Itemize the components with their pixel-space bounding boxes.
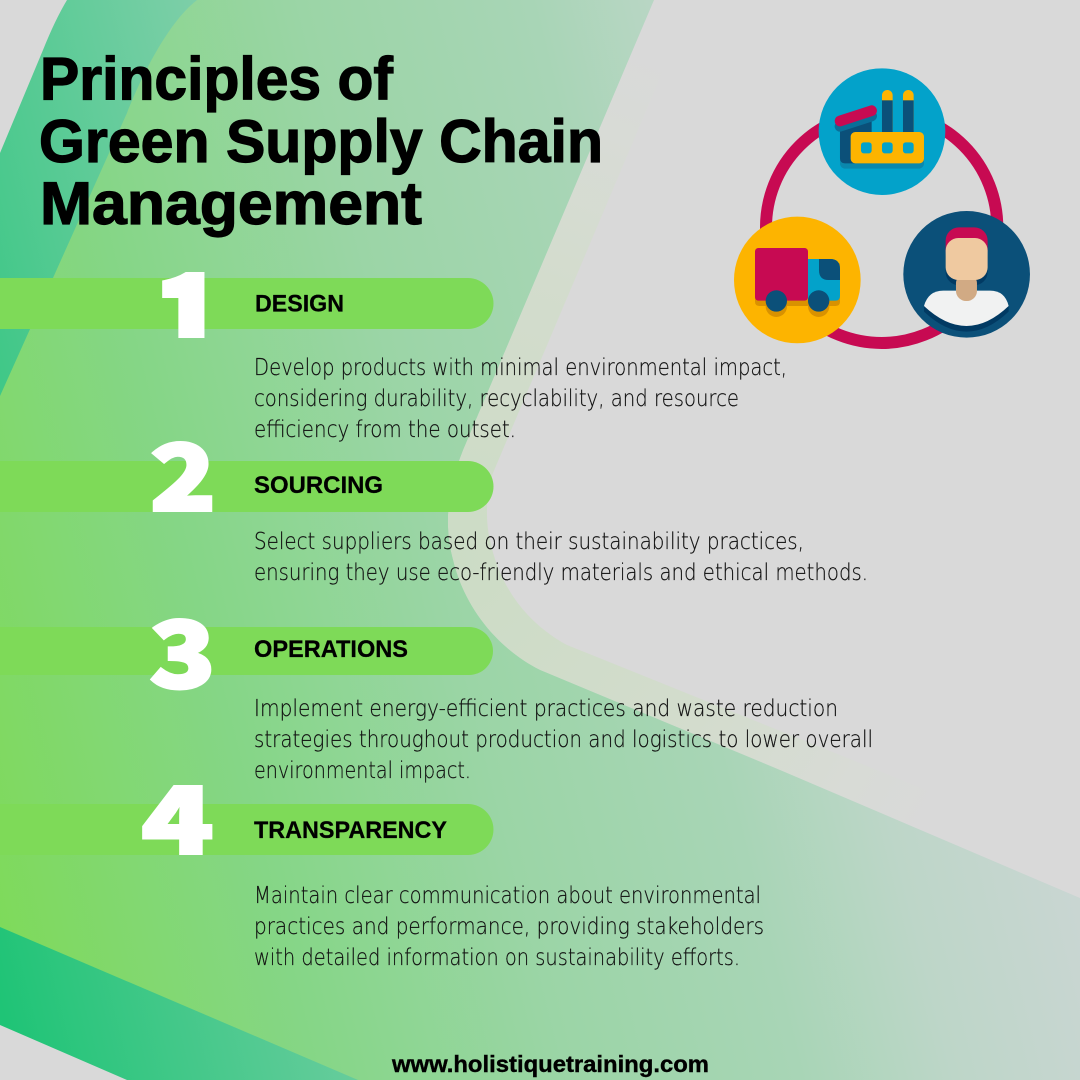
step 3: operations bbox=[0, 582, 873, 784]
body text: Develop products with minimal environmental impact, bbox=[254, 355, 787, 381]
step 2: sourcing bbox=[0, 404, 868, 586]
body text: efficiency from the outset. bbox=[254, 417, 516, 443]
number 1: 1 bbox=[153, 223, 225, 394]
pill bbox=[0, 804, 493, 855]
body text: environmental impact. bbox=[254, 758, 471, 784]
body text: Implement energy-efficient practices and waste reduction bbox=[254, 696, 838, 722]
body text: with detailed information on sustainability efforts. bbox=[254, 945, 740, 971]
pill bbox=[0, 278, 494, 329]
footer url: www.holistiquetraining.com bbox=[391, 1051, 709, 1077]
heading: DESIGN bbox=[255, 290, 344, 318]
icon: supply chain cycle bbox=[734, 68, 1030, 343]
body text: ensuring they use eco-friendly materials and ethical methods. bbox=[254, 560, 868, 586]
body text: Maintain clear communication about environmental bbox=[254, 883, 761, 909]
body text bbox=[254, 696, 873, 784]
number 4: 4 bbox=[142, 748, 214, 880]
heading: TRANSPARENCY bbox=[254, 817, 447, 844]
title: Principles of bbox=[40, 46, 394, 112]
step 1: design bbox=[0, 272, 784, 442]
number 3: 3 bbox=[150, 582, 216, 714]
body text bbox=[254, 529, 868, 586]
heading: SOURCING bbox=[254, 472, 383, 499]
body text: strategies throughout production and logistics to lower overall bbox=[254, 727, 873, 753]
step 4: transparency bbox=[0, 748, 764, 971]
pill bbox=[0, 627, 493, 675]
ring bbox=[766, 112, 997, 343]
icon: delivery truck bbox=[734, 217, 861, 343]
number 2: 2 bbox=[150, 404, 216, 538]
body text: considering durability, recyclability, and resource bbox=[254, 386, 739, 412]
body text bbox=[254, 883, 764, 971]
icon: person bbox=[903, 211, 1030, 338]
body text bbox=[254, 355, 787, 443]
heading: OPERATIONS bbox=[254, 636, 408, 663]
title bbox=[39, 46, 603, 237]
title: Green Supply Chain bbox=[39, 108, 603, 175]
icon: factory bbox=[819, 68, 945, 195]
body text: practices and performance, providing stakeholders bbox=[254, 914, 764, 940]
background shape: pale band bbox=[400, 0, 1080, 1080]
body text: Select suppliers based on their sustainability practices, bbox=[254, 529, 804, 555]
title: Management bbox=[40, 170, 422, 237]
pill bbox=[0, 461, 494, 512]
